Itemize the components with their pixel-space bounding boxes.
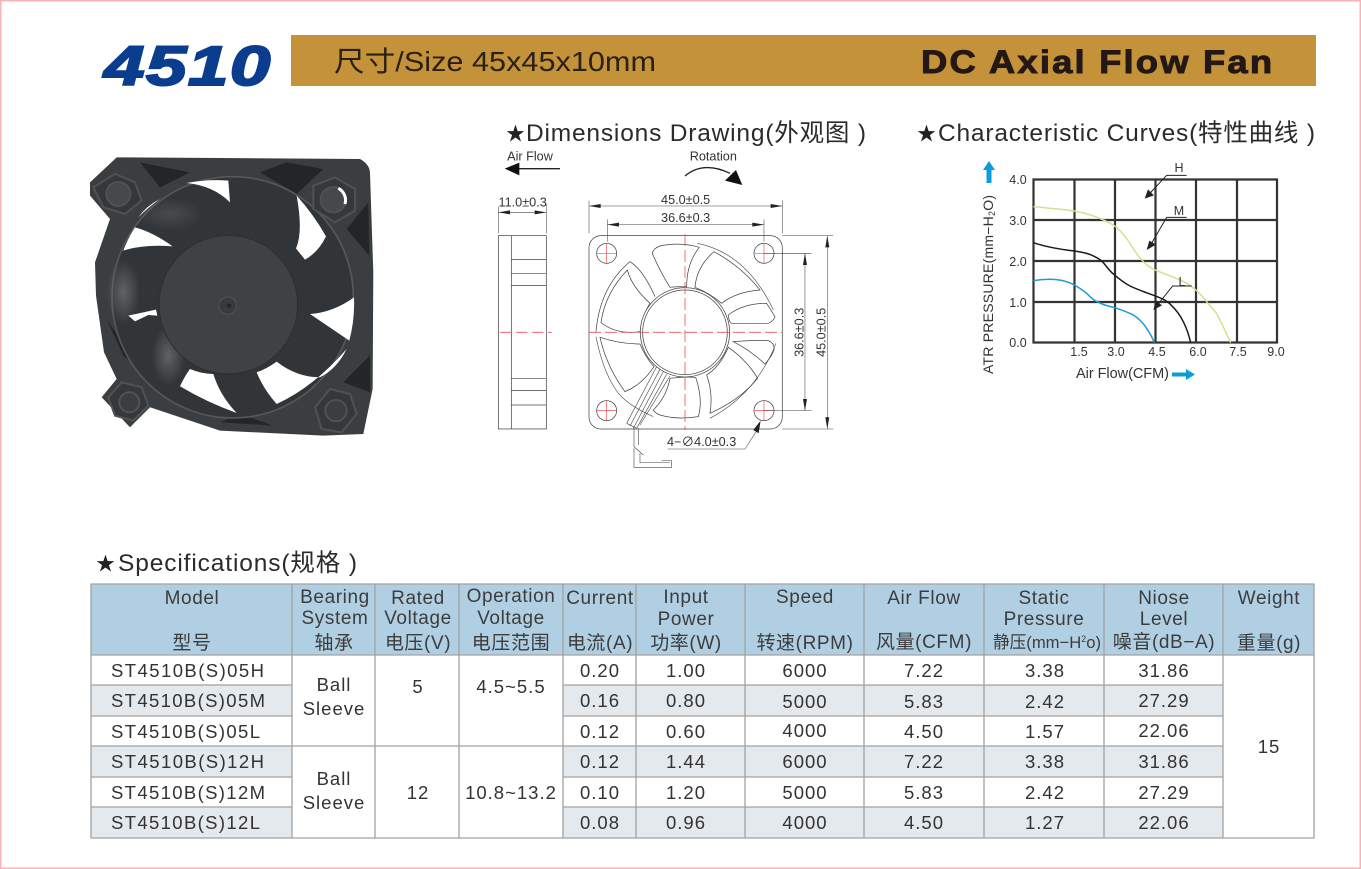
merged cells: Ball [317, 674, 351, 695]
merged cells: Sleeve [303, 792, 365, 813]
x tick labels: 1.5 [1070, 345, 1088, 359]
center lines [589, 234, 782, 430]
table header text: Static [1018, 588, 1070, 609]
row 05H: 7.22 [904, 660, 944, 681]
row 12H: 3.38 [1025, 751, 1065, 772]
heading: specifications: ★ [96, 554, 115, 575]
row 12H [580, 751, 1190, 772]
table header text: 型号 [172, 632, 212, 654]
characteristic curves chart: L [1179, 275, 1186, 289]
model column: ST4510B(S)05L [111, 721, 260, 742]
row 05M: 2.42 [1025, 691, 1065, 712]
row 12H: 31.86 [1138, 751, 1190, 772]
front view [589, 234, 782, 467]
grid [1034, 180, 1277, 342]
row 05H: 6000 [782, 660, 828, 681]
table header text: Operation [467, 586, 555, 607]
row 12H: 6000 [782, 751, 828, 772]
row 12M [580, 782, 1190, 803]
row 05L: 4000 [782, 720, 828, 741]
row 05M: 0.80 [666, 690, 706, 711]
air flow arrow: Air Flow [507, 150, 554, 164]
y tick labels: 0.0 [1009, 336, 1027, 350]
table header text: Rated [391, 588, 445, 609]
model column: ST4510B(S)05M [111, 690, 265, 711]
dimension lines: 45.0±0.5 [814, 308, 828, 357]
row 05L: 0.60 [666, 721, 706, 742]
banner size text: 尺寸/Size 45x45x10mm [334, 46, 656, 77]
table header text: 风量(CFM) [876, 632, 972, 653]
table header text: 转速(RPM) [756, 632, 854, 654]
white gaps between blades [123, 180, 354, 413]
row 05L: 0.12 [580, 721, 620, 742]
x tick labels: 6.0 [1189, 345, 1207, 359]
table header text: Current [566, 588, 634, 609]
rotation arrow: Rotation [690, 150, 737, 164]
row 12L: 22.06 [1138, 812, 1190, 833]
heading: characteristic curves: ★ [917, 124, 936, 145]
characteristic curves chart: M [1174, 204, 1184, 218]
characteristic curves chart [980, 161, 1285, 382]
row 05M: 5.83 [904, 691, 944, 712]
curves [1033, 207, 1231, 343]
title: model number: 4510 [102, 34, 270, 97]
merged cells: 15 [1258, 736, 1280, 757]
row 12M: 5.83 [904, 782, 944, 803]
fan blades [112, 177, 353, 418]
row 05H: 0.20 [580, 660, 620, 681]
x tick labels: 4.5 [1148, 345, 1166, 359]
icon: right arrow [1172, 369, 1195, 380]
table header text: 轴承 [314, 632, 354, 654]
table header text: 静压(mm−H [993, 633, 1083, 652]
table header text: Air Flow [887, 588, 961, 609]
merged cells [303, 674, 1280, 813]
y axis label: ATR PRESSURE(mm−H [980, 216, 996, 374]
merged cells: 10.8~13.2 [465, 782, 557, 803]
banner [291, 35, 1316, 86]
banner product name: DC Axial Flow Fan [921, 45, 1272, 80]
row 12M: 0.10 [580, 782, 620, 803]
table header text: Level [1140, 609, 1188, 630]
model column: ST4510B(S)05H [111, 660, 264, 681]
table header background [91, 584, 1314, 655]
fan frame [90, 157, 373, 436]
table grid [91, 584, 1314, 838]
dimension lines: 45.0±0.5 [661, 193, 710, 207]
row 05L: 22.06 [1138, 720, 1190, 741]
row 05M [580, 690, 1190, 712]
row 05M: 5000 [782, 691, 828, 712]
specifications table [91, 584, 1314, 838]
fan hub [159, 235, 298, 374]
dimension lines: 36.6±0.3 [793, 308, 807, 357]
row 05M: 0.16 [580, 690, 620, 711]
fan product photo [90, 157, 373, 436]
y axis label: O) [980, 195, 996, 211]
row 05H: 31.86 [1138, 660, 1190, 681]
table header text: o) [1086, 633, 1101, 652]
table header text: 重量(g) [1237, 632, 1301, 654]
side view: 11.0±0.3 [499, 195, 547, 209]
x tick labels: 9.0 [1267, 345, 1285, 359]
table header text [165, 586, 1301, 654]
row 05H [580, 660, 1190, 681]
y tick labels [1009, 173, 1027, 350]
x tick labels: 7.5 [1229, 345, 1247, 359]
dimension lines: 4−∅4.0±0.3 [667, 435, 736, 449]
model column [111, 660, 265, 833]
table header text: Weight [1238, 588, 1300, 609]
row 12L [580, 812, 1190, 833]
table header text: Bearing [300, 587, 370, 608]
table header text: 2 [1081, 634, 1086, 644]
row 05M: 27.29 [1138, 690, 1190, 711]
x axis label: Air Flow(CFM) [1076, 366, 1169, 382]
row 05H: 1.00 [666, 660, 706, 681]
model column: ST4510B(S)12H [111, 751, 264, 772]
table header text: 噪音(dB−A) [1113, 631, 1215, 653]
mounting bosses [93, 174, 357, 432]
heading: specifications: Specifications(规格 ) [118, 549, 357, 577]
row 12M: 1.20 [666, 782, 706, 803]
wires [627, 367, 672, 467]
y tick labels: 3.0 [1009, 214, 1027, 228]
table header text: Niose [1138, 588, 1190, 609]
table header text: System [302, 608, 368, 629]
dimension lines [589, 193, 833, 449]
rotation arrow [685, 150, 742, 185]
table header text: Input [663, 587, 709, 608]
row 12L: 0.96 [666, 812, 706, 833]
row 12H: 7.22 [904, 751, 944, 772]
row 12L: 1.27 [1025, 812, 1065, 833]
table header text: Voltage [477, 608, 545, 629]
alternating rows [91, 685, 1223, 838]
row 12L: 0.08 [580, 812, 620, 833]
side view [498, 195, 552, 429]
heading: dimensions drawing: ★ [506, 124, 525, 145]
model column: ST4510B(S)12M [111, 782, 265, 803]
y tick labels: 4.0 [1009, 173, 1027, 187]
row 12H: 0.12 [580, 751, 620, 772]
row 12L: 4000 [782, 812, 828, 833]
table header text: 电流(A) [567, 632, 633, 654]
heading: characteristic curves: Characteristic Curves(特性曲线 ) [938, 119, 1315, 147]
table header text: Speed [776, 587, 834, 608]
air flow arrow [505, 150, 560, 175]
table header text: 电压范围 [472, 632, 550, 654]
x tick labels: 3.0 [1107, 345, 1125, 359]
table header text: 电压(V) [385, 632, 451, 654]
characteristic curves chart: H [1174, 161, 1184, 175]
table header text: Voltage [384, 608, 452, 629]
merged cells: 4.5~5.5 [476, 676, 546, 697]
row 12L: 4.50 [904, 812, 944, 833]
model column: ST4510B(S)12L [111, 812, 260, 833]
dimensions drawing [498, 150, 833, 467]
y tick labels: 2.0 [1009, 255, 1027, 269]
dimension lines: 36.6±0.3 [661, 211, 710, 225]
icon: up arrow [983, 161, 995, 183]
row 05L [580, 720, 1190, 742]
merged cells: Sleeve [303, 698, 365, 719]
table header text: 功率(W) [650, 632, 722, 654]
row 12M: 2.42 [1025, 782, 1065, 803]
table header text: Power [658, 609, 714, 630]
heading: dimensions drawing: Dimensions Drawing(外观图 ) [526, 119, 866, 147]
row 05H: 3.38 [1025, 660, 1065, 681]
curve callouts H M L [1145, 175, 1192, 310]
y tick labels: 1.0 [1009, 296, 1027, 310]
merged cells: 5 [412, 676, 424, 697]
row 12M: 27.29 [1138, 782, 1190, 803]
row 12H: 1.44 [666, 751, 706, 772]
table header text: Pressure [1004, 609, 1084, 630]
y axis label: 2 [987, 211, 997, 216]
x tick labels [1070, 345, 1285, 359]
merged cells: Ball [317, 768, 351, 789]
merged cells: 12 [407, 782, 429, 803]
table header text: Model [165, 588, 219, 609]
row 12M: 5000 [782, 782, 828, 803]
row 05L: 1.57 [1025, 721, 1065, 742]
row 05L: 4.50 [904, 721, 944, 742]
